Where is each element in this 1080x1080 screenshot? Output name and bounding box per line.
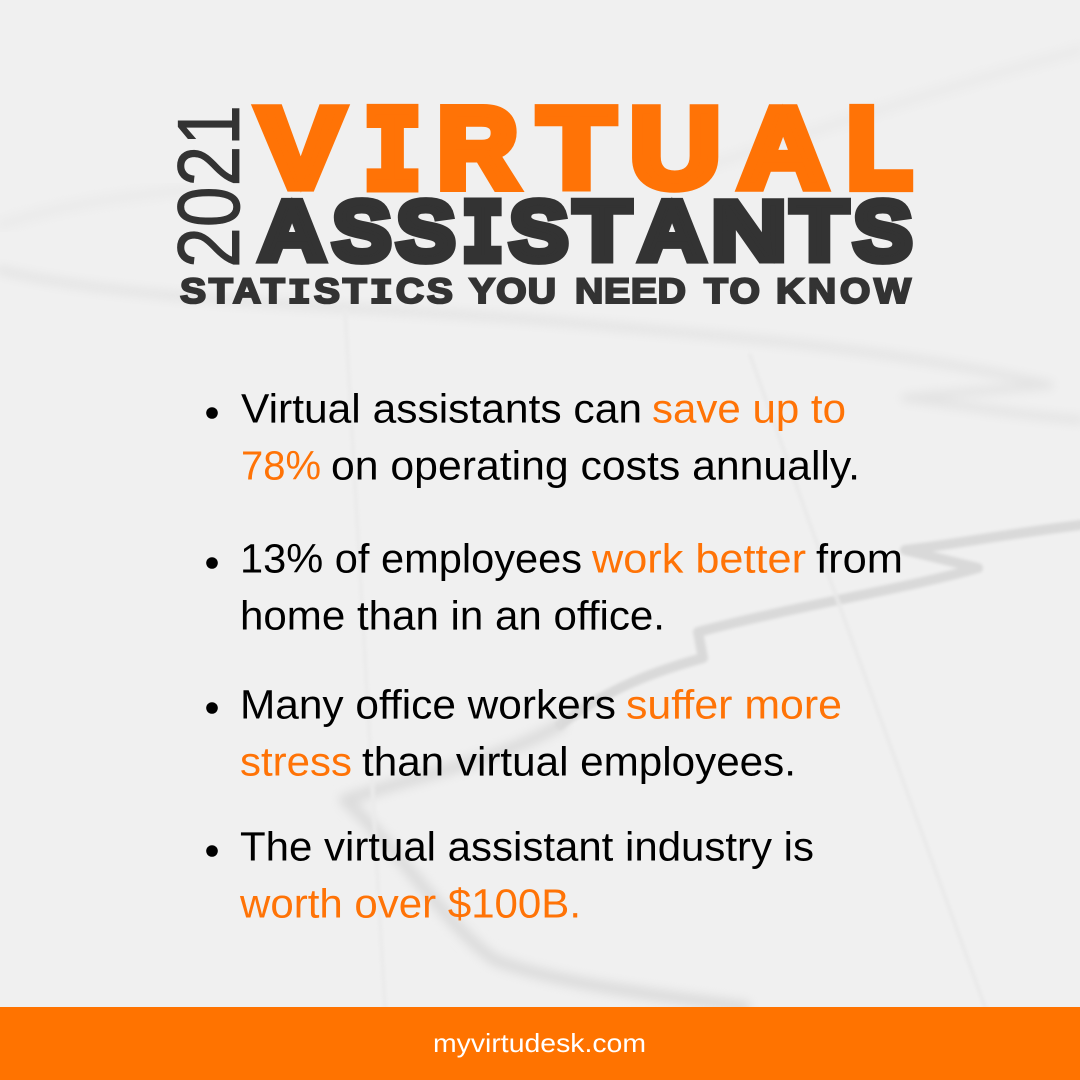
bullet 3: Many office workers [240, 682, 616, 728]
title: VIRTUAL: T [538, 85, 615, 212]
footer bar: myvirtudesk.com [433, 1028, 646, 1058]
title: VIRTUAL [258, 84, 912, 223]
title: ASSISTANTS: A [639, 183, 705, 278]
bullet 2: 13% of employees [240, 536, 582, 582]
title: VIRTUAL: L [847, 86, 912, 212]
subtitle [180, 271, 912, 314]
bullet 1 [206, 386, 860, 488]
bullet 4: worth over $100B. [239, 880, 581, 926]
bullet 2: from [816, 536, 903, 582]
bullet 1: Virtual assistants can [241, 386, 642, 432]
bullet 4: The virtual assistant industry is [240, 824, 814, 870]
bullet 3: stress [240, 738, 352, 784]
bullet 1: 78% [241, 442, 321, 488]
subtitle: NEED [575, 271, 686, 311]
subtitle: KNOW [776, 271, 912, 311]
title: ASSISTANTS: A [259, 183, 325, 278]
heading [159, 84, 912, 314]
bullet 1: on operating costs annually. [331, 442, 860, 488]
footer bar [0, 1007, 1080, 1080]
title: ASSISTANTS [259, 183, 912, 287]
bullet 4 [206, 824, 814, 926]
subtitle: YOU [469, 271, 556, 311]
bullet 3: suffer more [626, 682, 842, 728]
title: ASSISTANTS: N [711, 185, 787, 279]
title: ASSISTANTS: I [462, 187, 503, 287]
bullet 2 [206, 536, 903, 638]
subtitle: STATISTICS [180, 271, 453, 314]
title: VIRTUAL: U [630, 85, 721, 212]
title: ASSISTANTS: S [332, 185, 391, 279]
title: ASSISTANTS: S [854, 185, 912, 279]
title: ASSISTANTS: T [574, 184, 631, 278]
title: ASSISTANTS: S [396, 185, 455, 279]
bullet 2: work better [591, 536, 806, 582]
bullet 1: save up to [652, 386, 846, 432]
title: VIRTUAL: R [438, 84, 518, 211]
label: year 2021: 2021 [159, 105, 258, 268]
subtitle: TO [704, 271, 760, 311]
bullet list [206, 386, 903, 926]
title: VIRTUAL: V [258, 84, 344, 211]
bullet 2: home than in an office. [240, 592, 665, 638]
bullet 3: than virtual employees. [362, 738, 796, 784]
title: ASSISTANTS: T [791, 184, 848, 278]
title: VIRTUAL: A [739, 84, 827, 211]
title: VIRTUAL: I [364, 90, 421, 223]
title: ASSISTANTS: S [510, 185, 568, 279]
bullet 3 [206, 682, 842, 784]
